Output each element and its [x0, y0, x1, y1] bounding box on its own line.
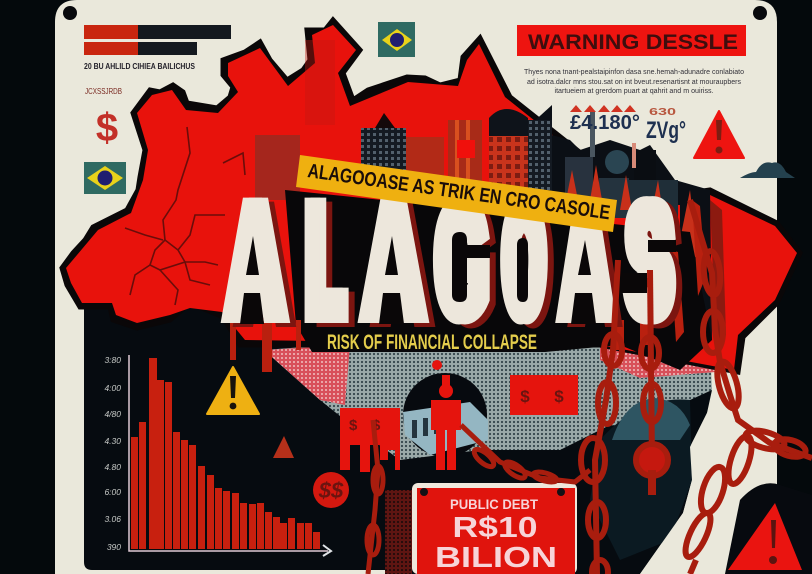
text: S — [636, 178, 681, 352]
public debt plaque — [412, 483, 577, 574]
title letters thickening layer: L — [304, 174, 341, 348]
title letters: L — [310, 174, 347, 348]
pin hole left — [63, 6, 77, 20]
text: S — [630, 174, 675, 348]
icon: flag left — [84, 162, 126, 194]
warning body text: itartueiem at grerdom puart at qahrit and m ouiriss. — [554, 86, 714, 95]
chain: right — [681, 200, 812, 574]
bank in dark circle — [403, 373, 488, 457]
title shadow — [237, 178, 681, 352]
stat: amount: £4.180° — [570, 112, 640, 134]
red drips behind title — [230, 200, 706, 372]
chain: left — [367, 420, 383, 574]
title shadow: L — [316, 178, 353, 352]
axis labels: 4.80 — [104, 462, 121, 472]
title shadow: A — [237, 178, 292, 352]
title letter counters — [240, 232, 676, 324]
public debt plaque: R$10 — [452, 512, 538, 544]
warning body text: Thyes nona tnant-pealstaipinfon dasa sne.hemah-adunadre conlabiato — [524, 67, 744, 76]
warning banner — [517, 25, 746, 56]
black bottom-right shape — [725, 483, 812, 574]
icon: flag top — [378, 22, 415, 57]
red bill: $ — [554, 387, 564, 406]
stat: percent: 630 — [649, 107, 677, 118]
main title: S — [624, 174, 669, 348]
warning body text: ad isotra.dalcr mns stou.sat on int bveut.resenartisnt at mouraupbers — [527, 77, 741, 86]
icon: red warning triangle — [694, 111, 744, 158]
chart axes — [129, 355, 328, 551]
axis labels: 4/80 — [104, 409, 121, 419]
title letters: A — [368, 174, 425, 348]
axis labels: 390 — [107, 542, 121, 552]
public debt plaque: BILION — [435, 542, 557, 574]
top-left bars — [84, 25, 231, 55]
pin hole right — [753, 6, 767, 20]
chart bars — [131, 358, 320, 549]
cream bottom-right area — [640, 395, 777, 574]
title letters thickening layer: A — [559, 174, 607, 348]
chain: diagonal — [461, 425, 590, 484]
icon: yellow warning triangle — [207, 367, 259, 414]
left dripping bill: $ — [372, 417, 381, 434]
title letters thickening layer — [225, 174, 669, 348]
bar chart — [104, 355, 331, 556]
public debt plaque: PUBLIC DEBT — [450, 496, 538, 512]
axis labels: 3:80 — [104, 355, 121, 365]
axis labels: 4.30 — [104, 436, 121, 446]
icon: dollar coin: $$ — [318, 478, 344, 503]
warning body text — [524, 67, 744, 95]
axis labels — [104, 355, 121, 552]
halftone central area — [264, 345, 722, 574]
city skyline — [361, 105, 712, 340]
title shadow: G — [446, 178, 496, 352]
small red label: JCXSSJRDB — [85, 87, 122, 96]
left dripping bill: $ — [349, 417, 358, 434]
icon: cloud — [740, 162, 795, 178]
title letters — [231, 174, 675, 348]
stat: percent — [646, 107, 686, 144]
title letters: O — [507, 174, 547, 348]
title shadow: O — [513, 178, 553, 352]
left dripping bill — [340, 408, 400, 472]
title shadow: A — [374, 178, 431, 352]
title letters: A — [565, 174, 613, 348]
subtitle: RISK OF FINANCIAL COLLAPSE — [327, 331, 537, 354]
title shadow: A — [571, 178, 619, 352]
top-left caption: 20 BU AHLILD CIHIEA BAILICHUS — [84, 62, 196, 71]
title letters thickening layer: A — [225, 174, 280, 348]
axis arrow — [323, 545, 331, 556]
title letters: G — [440, 174, 490, 348]
icon: small warning triangle — [273, 436, 294, 458]
chain: centre — [581, 260, 622, 574]
red bill — [510, 375, 578, 415]
dark lower background — [84, 300, 712, 574]
yellow tape banner: ALAGOOASE AS TRIK EN CRO CASOLE — [306, 160, 611, 224]
stat: percent: ZVg° — [646, 117, 686, 144]
warning banner: WARNING DESSLE — [528, 31, 738, 54]
dark mass behind title — [285, 190, 712, 370]
map of Brazil in red — [62, 20, 800, 372]
red bill: $ — [520, 387, 530, 406]
map cracks — [125, 127, 245, 305]
title letters: A — [231, 174, 286, 348]
axis labels: 3.06 — [104, 514, 121, 524]
chain: lock — [636, 270, 668, 495]
axis labels: 4:00 — [104, 383, 121, 393]
icon: corner warning triangle — [728, 503, 802, 570]
title letters thickening layer: G — [434, 174, 484, 348]
title letters thickening layer: O — [501, 174, 541, 348]
red person figure — [431, 360, 461, 470]
main title — [225, 174, 681, 352]
icon: dollar coin — [313, 472, 349, 508]
axis labels: 6:00 — [104, 487, 121, 497]
icon: dripping dollar: $ — [96, 106, 118, 150]
title letters thickening layer: A — [362, 174, 419, 348]
